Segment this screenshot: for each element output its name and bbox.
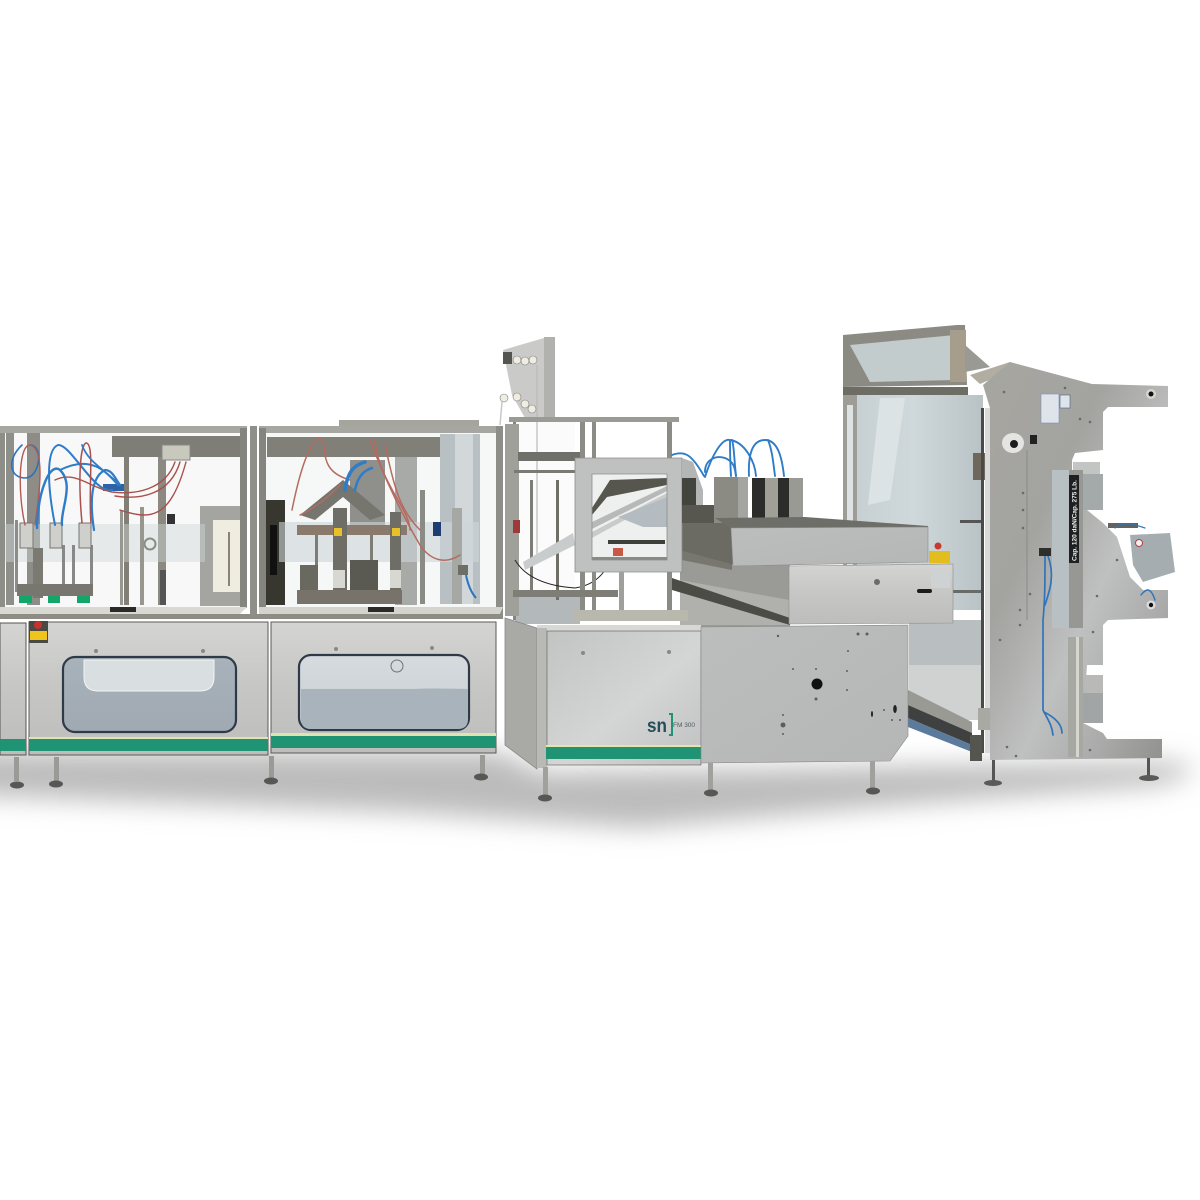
window 1 [63, 657, 236, 732]
yellow emergency stop [929, 542, 950, 563]
frame 2 interior [259, 420, 503, 610]
sealing head blocks [682, 477, 803, 523]
panel 2 [271, 622, 496, 753]
frame bars [0, 426, 503, 619]
top table [509, 417, 679, 600]
logo: FM 300 [673, 722, 695, 729]
film band [279, 522, 479, 562]
square guide frame [575, 458, 703, 572]
feet left module [10, 755, 488, 788]
plain panel [701, 625, 908, 763]
linear actuator with capacity label [1052, 470, 1083, 757]
floor shadow [0, 752, 1195, 828]
blue manifold [103, 484, 124, 491]
side panel [505, 618, 537, 769]
lower cover box [789, 564, 953, 624]
rods and dosing heads [15, 507, 175, 605]
left filling module [0, 420, 503, 788]
spool panel [500, 337, 555, 560]
centre background structure [505, 420, 790, 627]
plate rivets [999, 387, 1118, 757]
panel 0 [0, 623, 26, 755]
label plate [1041, 394, 1070, 423]
view through guide window [590, 473, 669, 562]
top cover plate [339, 420, 479, 426]
feet centre [538, 761, 880, 802]
rail above upper cover [715, 517, 928, 529]
panel 1 [29, 622, 268, 755]
translucent film band [0, 524, 205, 562]
model panel [546, 631, 701, 765]
upper cover box [731, 527, 928, 566]
film unwind section [843, 325, 1175, 786]
centre infeed section [500, 337, 953, 802]
central forming mechanism [297, 480, 407, 604]
cabinet rivets [94, 646, 434, 653]
tension sensor [1002, 433, 1037, 453]
blue and red cables: frame 2 [292, 438, 460, 560]
vertical door rails [970, 408, 990, 761]
black side column [266, 500, 285, 605]
side plate [983, 362, 1168, 760]
cabinet behind frame 1 [200, 506, 240, 606]
junction box [162, 445, 190, 460]
right side sensor group [420, 490, 476, 604]
blue and red cables: frame 1 [12, 443, 186, 530]
rear film housing [843, 395, 985, 752]
emergency stop [29, 621, 48, 643]
film brake bracket [1108, 523, 1175, 610]
frame 1 interior [0, 430, 247, 610]
front top lip [537, 625, 701, 631]
green blocks [19, 596, 90, 603]
cabinet panels [0, 621, 496, 755]
top roller [1146, 389, 1156, 399]
blue pneumatic hoses [672, 440, 784, 477]
logo: sn [647, 716, 667, 737]
green stripe [546, 747, 701, 759]
window 2 [299, 655, 469, 730]
top film frame [843, 325, 1012, 395]
legs under guide frame [513, 572, 688, 621]
logo [647, 714, 695, 737]
linear actuator with capacity label: Cap. 120 daN/Cap. 275 Lb. [1072, 480, 1078, 561]
cylinders [1073, 462, 1103, 723]
blue tubing on plate [1043, 524, 1155, 735]
feet tower [984, 758, 1159, 786]
